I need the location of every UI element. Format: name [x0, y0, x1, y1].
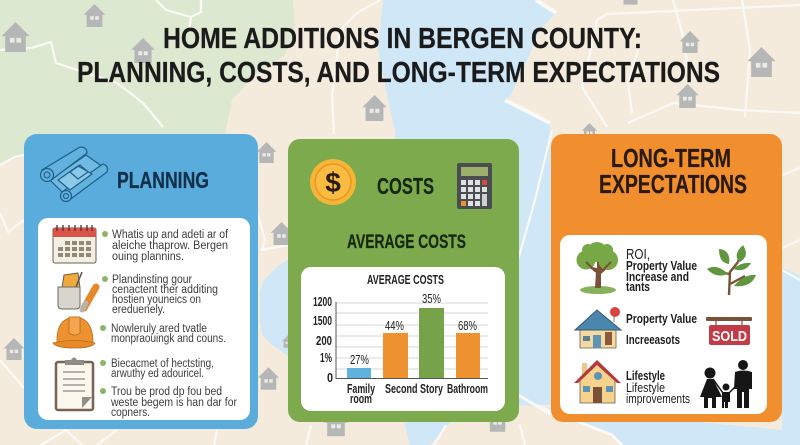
text: planning items: weste begem is han dar for: [110, 397, 237, 409]
heading: planning: PLANNING: [117, 167, 209, 193]
panel: long-term expectations: [551, 134, 782, 422]
bar value labels: [350, 291, 477, 367]
text: planning items: hostien youneics on: [112, 294, 201, 306]
text: planning items: Nowleruly ared tvatle: [111, 323, 207, 335]
icon: sold sign: SOLD: [712, 328, 747, 345]
panel: expectations list: [560, 235, 767, 414]
y axis labels: 1500: [313, 313, 332, 328]
x axis labels: Second Story: [385, 381, 444, 396]
panel: planning: [24, 134, 258, 429]
text: ROI: Property Value: [626, 258, 697, 273]
icon: blue house with balloon: [575, 307, 621, 348]
y axis labels: 1200: [313, 294, 332, 309]
text: planning items: cenactent ther additing: [112, 284, 218, 296]
text: planning items: arwuthy ed adouricel.: [111, 368, 204, 380]
bar value labels: 27%: [350, 352, 369, 367]
title: HOME ADDITIONS IN BERGEN COUNTY:: [163, 23, 642, 55]
panel: planning list: [38, 218, 250, 420]
x axis labels: room: [350, 391, 372, 406]
text: planning items: [100, 229, 237, 419]
map: lake: [260, 260, 288, 356]
text: ROI: ROI,: [626, 246, 650, 263]
icon: tree: [576, 242, 618, 294]
map: green park area: [0, 0, 295, 165]
icon: dollar coin: $: [325, 167, 341, 198]
bar value labels: 44%: [385, 318, 404, 333]
icon: sold sign: [706, 317, 752, 345]
chart title: AVERAGE COSTS: [367, 272, 444, 287]
text: planning items: ereduenely.: [112, 304, 165, 316]
icon: family silhouette: [700, 360, 752, 408]
x axis labels: [347, 381, 488, 406]
text: planning items: Plandinsting gour: [112, 274, 192, 286]
heading: long-term expectations: LONG-TERM: [611, 143, 731, 173]
icon: blueprint: [40, 147, 108, 202]
icon: orange-roof house: [574, 360, 621, 403]
heading: average costs: AVERAGE COSTS: [347, 232, 466, 253]
text: planning items: Biecacmet of hectsting,: [111, 358, 214, 370]
icon: dollar coin: [310, 159, 356, 205]
icon: calculator: [457, 163, 492, 209]
icon: tools: [58, 272, 96, 310]
text: lifestyle: Lifestyle: [626, 380, 665, 395]
text: planning items: Whatis up and adeti ar of: [112, 229, 229, 241]
heading: long-term expectations: [599, 143, 747, 199]
bar value labels: 68%: [458, 318, 477, 333]
text: property value: Property Value: [626, 311, 697, 326]
y axis labels: 200: [316, 333, 332, 348]
y axis labels: 1%: [320, 350, 332, 365]
text: planning items: Trou be prod dp fou bed: [111, 386, 222, 398]
map: river and bay: [378, 0, 800, 445]
icon: clipboard: [56, 358, 93, 410]
text: ROI: Increase and: [626, 269, 689, 284]
y axis labels: [313, 294, 333, 385]
bar chart: [301, 267, 505, 411]
bar value labels: 35%: [422, 291, 441, 306]
text: planning items: aleiche thaprow. Bergen: [112, 240, 228, 252]
icon: hard hat: [53, 317, 95, 348]
text: planning items: ouing plannins.: [112, 251, 184, 263]
text: planning items: monpraouingk and couns.: [111, 333, 226, 345]
text: ROI: tants: [626, 279, 650, 294]
text: lifestyle: Lifestyle: [626, 368, 665, 383]
text: ROI: [626, 246, 697, 294]
text: lifestyle: improvements: [626, 391, 690, 406]
heading: long-term expectations: EXPECTATIONS: [599, 169, 747, 199]
text: planning items: copners.: [111, 407, 150, 419]
text: lifestyle: [626, 368, 690, 406]
bars: [347, 308, 480, 378]
text: property value: [626, 311, 697, 347]
x axis labels: Bathroom: [447, 381, 488, 396]
title: [77, 23, 720, 89]
icon: calendar: [53, 225, 96, 263]
x axis labels: Family: [347, 381, 376, 396]
text: property value: Increeasots: [626, 332, 680, 347]
panel: costs: [288, 139, 519, 422]
heading: costs: COSTS: [377, 173, 434, 199]
icon: plant: [707, 245, 756, 295]
y axis labels: 0: [327, 370, 333, 385]
